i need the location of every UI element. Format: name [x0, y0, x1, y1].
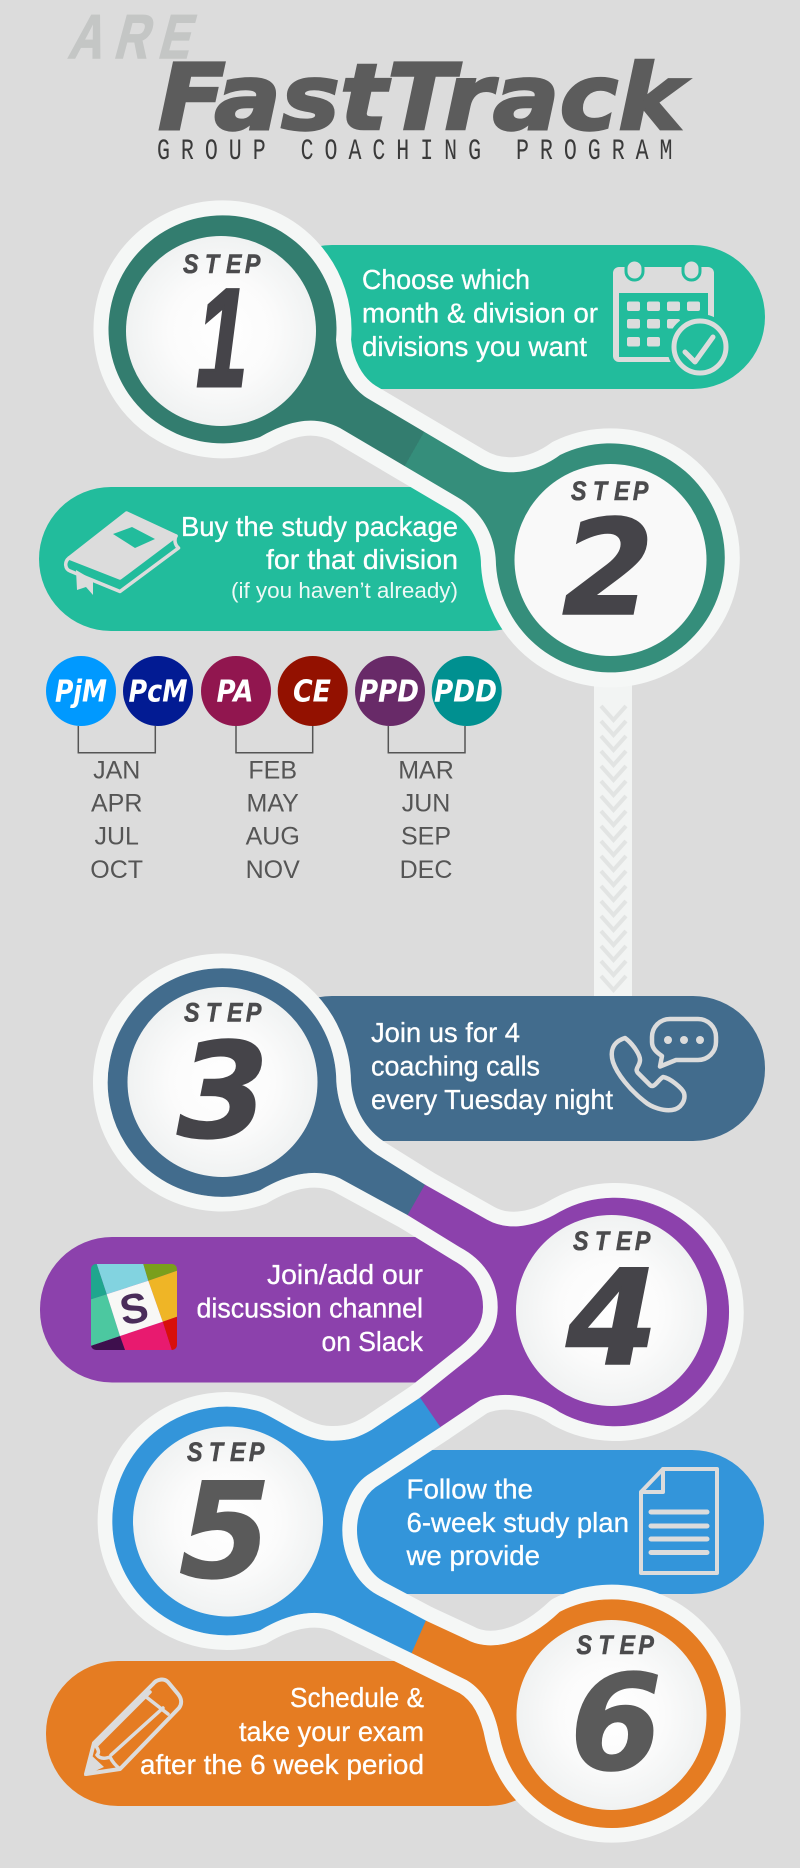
- step 5 badge: [133, 1426, 323, 1616]
- panel: step 1 callout: month & division or: [362, 298, 598, 328]
- step 3 segment: [108, 969, 425, 1215]
- panel: step 2 callout: Buy the study package: [181, 511, 458, 542]
- step 3 badge: STEP: [184, 998, 262, 1028]
- months: group 1: OCT: [90, 856, 143, 884]
- panel: step 3 callout: [260, 996, 765, 1141]
- months: group 3: [398, 756, 454, 884]
- months: group 1: JUL: [94, 823, 139, 851]
- connector band: steps 3 to 6: [108, 969, 729, 1828]
- panel: step 2 callout: for that division: [266, 544, 458, 575]
- step 4 badge: 4: [565, 1242, 658, 1396]
- step 5 badge: STEP: [187, 1437, 265, 1467]
- badge: PDD: PDD: [434, 675, 497, 710]
- step 4 segment: [408, 1185, 729, 1427]
- step 6 badge: 6: [570, 1647, 662, 1801]
- panel: step 4 callout: [40, 1237, 483, 1382]
- months: group 3: DEC: [400, 856, 452, 884]
- panel: step 5 callout: 6-week study plan: [406, 1507, 629, 1538]
- panel: step 5 callout: [342, 1450, 764, 1594]
- step 2 badge: STEP: [571, 476, 649, 506]
- icon: pencil: [84, 1680, 181, 1776]
- title: [63, 2, 690, 168]
- badge: PPD: PPD: [359, 675, 419, 710]
- step 1-2 connector: [108, 215, 725, 672]
- months: group 2: FEB: [248, 756, 297, 784]
- panel: step 3 callout: coaching calls: [371, 1050, 540, 1082]
- step 2 badge: 2: [562, 492, 654, 646]
- step 4 badge: STEP: [573, 1226, 651, 1256]
- step 6 segment: [412, 1600, 726, 1828]
- months: group 2: NOV: [246, 856, 300, 884]
- months: group 1: JAN: [93, 756, 140, 784]
- step 6 badge: [516, 1620, 706, 1810]
- panel: step 4 callout: on Slack: [322, 1326, 423, 1357]
- panel: step 4 callout: Join/add our: [267, 1259, 423, 1290]
- subtitle: GROUP COACHING PROGRAM: [157, 134, 673, 168]
- step 3 badge: [128, 987, 318, 1177]
- months: group 2: AUG: [246, 823, 300, 851]
- icon: book: [66, 513, 178, 595]
- badge: PjM: [46, 656, 116, 726]
- months: group 2: MAY: [247, 790, 299, 818]
- step 5 badge: 5: [179, 1455, 271, 1609]
- badge: PcM: PcM: [128, 675, 188, 710]
- badge: CE: CE: [293, 675, 331, 710]
- panel: step 6 callout: [46, 1661, 560, 1806]
- badge: PjM: PjM: [55, 675, 107, 710]
- icon: calendar: [613, 260, 733, 380]
- step 6 badge: STEP: [576, 1630, 654, 1660]
- decorative bar: vertical track: [594, 680, 632, 996]
- icon: Slack logo: S: [116, 1283, 152, 1334]
- badge: CE: [278, 656, 348, 726]
- step 5 segment: [113, 1398, 440, 1653]
- panel: step 6 callout: Schedule &: [290, 1682, 424, 1713]
- step 4 badge: [516, 1215, 707, 1406]
- panel: step 5 callout: we provide: [405, 1540, 540, 1571]
- months: group 3: SEP: [401, 823, 451, 851]
- chevrons: [601, 706, 626, 990]
- white outline: [108, 969, 729, 1828]
- panel: step 2 callout: [39, 487, 560, 631]
- step 1 badge: [126, 236, 316, 426]
- panel: step 1 callout: divisions you want: [362, 331, 587, 362]
- step 3 badge: 3: [177, 1015, 269, 1169]
- badge: PA: [201, 656, 271, 726]
- FastTrack wordmark: FastTrack: [158, 46, 690, 151]
- step 2 badge: [514, 464, 706, 656]
- badge: PPD: [355, 656, 425, 726]
- panel: step 6 callout: take your exam: [239, 1716, 424, 1747]
- panel: step 2 callout: (if you haven’t already): [231, 578, 458, 603]
- icon: phone and chat bubble: [612, 1019, 716, 1110]
- badge: PcM: [123, 656, 193, 726]
- months: group 1: [90, 756, 143, 884]
- months: group 3: JUN: [402, 790, 450, 818]
- panel: step 3 callout: every Tuesday night: [371, 1084, 613, 1115]
- panel: step 3 callout: Join us for 4: [371, 1017, 520, 1048]
- panel: step 1 callout: Choose which: [362, 264, 530, 295]
- months: group 2: [246, 756, 300, 884]
- badge: PA: PA: [216, 675, 254, 710]
- ARE label: ARE: [63, 2, 203, 71]
- months: group 3: MAR: [398, 756, 454, 784]
- panel: step 4 callout: discussion channel: [196, 1292, 423, 1324]
- division badges and months: [46, 656, 502, 884]
- months: group 1: APR: [91, 790, 142, 818]
- panel: step 5 callout: Follow the: [406, 1474, 533, 1504]
- panel: step 6 callout: after the 6 week period: [140, 1749, 424, 1780]
- panel: step 1 callout: [260, 245, 765, 389]
- step 1 badge: 1: [196, 261, 248, 417]
- icon: Slack logo: [91, 1264, 177, 1350]
- icon: document: [641, 1469, 717, 1573]
- badge: PDD: [432, 656, 502, 726]
- step 1 badge: STEP: [183, 249, 261, 279]
